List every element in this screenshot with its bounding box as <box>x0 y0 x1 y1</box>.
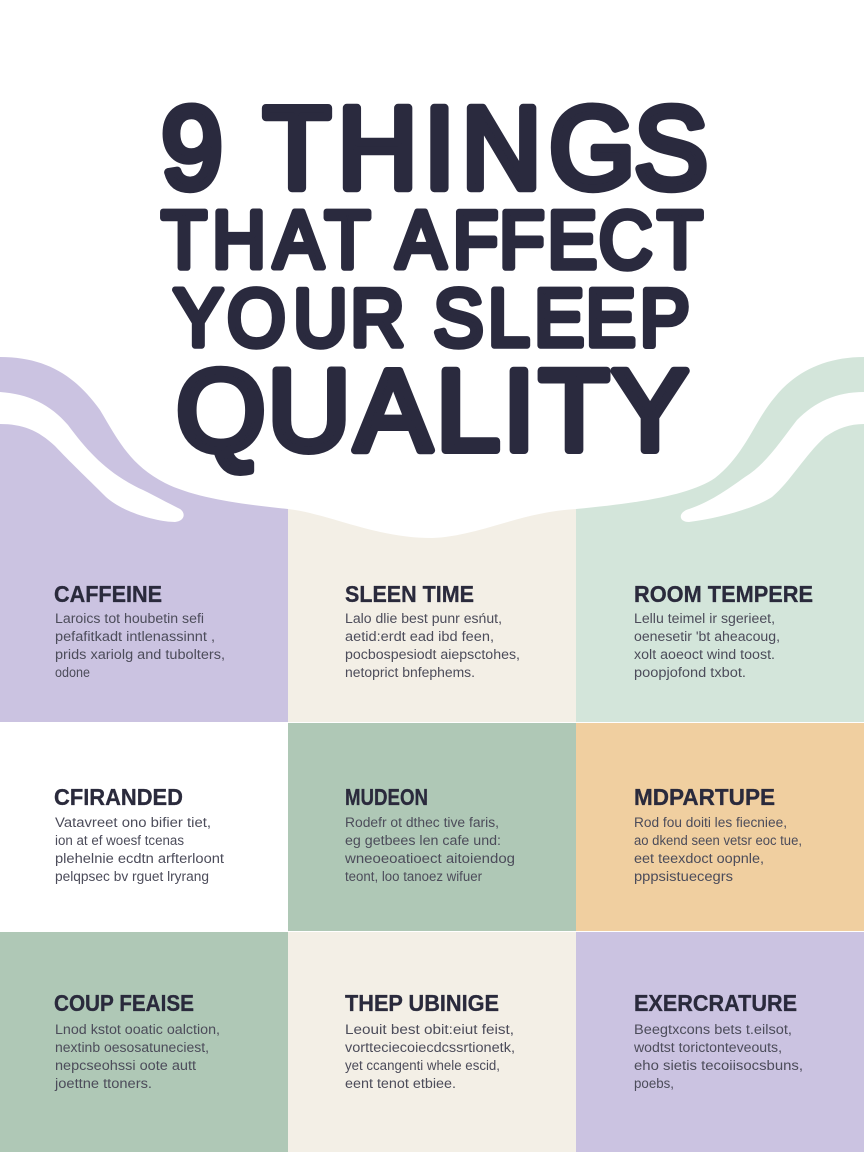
panel: caffeine <box>0 357 288 722</box>
text block: coup feaise: nepcseohssi oote autt <box>55 1058 196 1073</box>
heading: sleen time: SLEEN TIME <box>345 581 474 607</box>
text block: caffeine: odone <box>55 665 90 680</box>
title <box>161 83 708 475</box>
text block: exercrature: Beegtxcons bets t.eilsot, <box>634 1022 792 1037</box>
text block: thep ubinige: eent tenot etbiee. <box>345 1076 456 1091</box>
text block: exercrature: poebs, <box>634 1076 674 1091</box>
text block: sleen time: netoprict bnfephems. <box>345 665 475 680</box>
wave: left white ribbon <box>0 392 184 522</box>
text block: mdpartupe: Rod fou doiti les fiecniee, <box>634 815 787 830</box>
panel: mdpartupe <box>576 723 864 931</box>
text block: thep ubinige: vortteciecoiecdcssrtionetk, <box>345 1040 515 1055</box>
text block: cfiranded: Vatavreet ono bifier tiet, <box>55 815 211 830</box>
panel: thep ubinige <box>288 932 576 1152</box>
text block: mudeon: Rodefr ot dthec tive faris, <box>345 815 499 830</box>
panel: mudeon <box>288 723 576 931</box>
text block: thep ubinige: yet ccangenti whele escid, <box>345 1058 500 1073</box>
heading: cfiranded: CFIRANDED <box>54 784 183 810</box>
panel: room tempere <box>576 357 864 722</box>
title: QUALITY <box>176 347 688 475</box>
heading: mdpartupe: MDPARTUPE <box>634 784 775 810</box>
panel: exercrature <box>576 932 864 1152</box>
text block: caffeine <box>55 611 225 680</box>
text block: coup feaise <box>54 1022 220 1091</box>
text block: coup feaise: Lnod kstot ooatic oalction, <box>55 1022 220 1037</box>
text block: caffeine: pefafitkadt intlenassinnt , <box>55 629 215 644</box>
heading: caffeine: CAFFEINE <box>54 581 162 607</box>
text block: sleen time: Lalo dlie best punr esńut, <box>345 611 502 626</box>
heading: exercrature: EXERCRATURE <box>634 990 797 1016</box>
text block: mudeon: teont, loo tanoez wifuer <box>345 869 482 884</box>
text block: mdpartupe: pppsistuecegrs <box>634 869 733 884</box>
text block: thep ubinige <box>345 1022 515 1091</box>
title: 9 THINGS <box>161 83 708 213</box>
text block: exercrature <box>633 1022 803 1091</box>
text block: cfiranded: ion at ef woesf tcenas <box>55 833 184 848</box>
text block: coup feaise: joettne ttoners. <box>54 1076 152 1091</box>
text block: room tempere: oenesetir 'bt aheacoug, <box>634 629 780 644</box>
title: THAT AFFECT <box>161 196 703 285</box>
text block: mudeon: eg getbees len cafe und: <box>345 833 501 848</box>
heading: coup feaise: COUP FEAISE <box>54 990 194 1016</box>
text block: mdpartupe <box>634 815 802 884</box>
panel: cfiranded <box>0 723 288 931</box>
panel: sleen time <box>288 509 576 722</box>
wave: right white ribbon <box>681 392 864 522</box>
text block: mdpartupe: eet teexdoct oopnle, <box>634 851 764 866</box>
heading: room tempere: ROOM TEMPERE <box>634 581 813 607</box>
text block: caffeine: prids xariolg and tubolters, <box>55 647 225 662</box>
panel: coup feaise <box>0 932 288 1152</box>
text block: exercrature: eho sietis tecoiisocsbuns, <box>634 1058 803 1073</box>
text block: mdpartupe: ao dkend seen vetsr eoc tue, <box>634 833 802 848</box>
text block: sleen time: pocbospesiodt aiepsctohes, <box>345 647 520 662</box>
text block: mudeon: wneoeoatioect aitoiendog <box>344 851 515 866</box>
title: YOUR SLEEP <box>173 274 690 363</box>
text block: mudeon <box>344 815 515 884</box>
text block: cfiranded: pelqpsec bv rguet lryrang <box>55 869 209 884</box>
text block: exercrature: wodtst torictonteveouts, <box>633 1040 782 1055</box>
heading: thep ubinige: THEP UBINIGE <box>345 990 499 1016</box>
text block: coup feaise: nextinb oesosatuneciest, <box>55 1040 209 1055</box>
text block: thep ubinige: Leouit best obit:eiut feist, <box>345 1022 514 1037</box>
text block: caffeine: Laroics tot houbetin sefi <box>55 611 204 626</box>
text block: room tempere: xolt aoeoct wind toost. <box>634 647 775 662</box>
text block: sleen time: aetid:erdt ead ibd feen, <box>345 629 494 644</box>
text block: cfiranded: plehelnie ecdtn arfterloont <box>55 851 224 866</box>
text block: sleen time <box>345 611 520 680</box>
text block: room tempere: Lellu teimel ir sgerieet, <box>634 611 775 626</box>
text block: room tempere: poopjofond txbot. <box>634 665 746 680</box>
text block: room tempere <box>634 611 780 680</box>
text block: cfiranded <box>55 815 224 884</box>
heading: mudeon: MUDEON <box>345 784 428 810</box>
